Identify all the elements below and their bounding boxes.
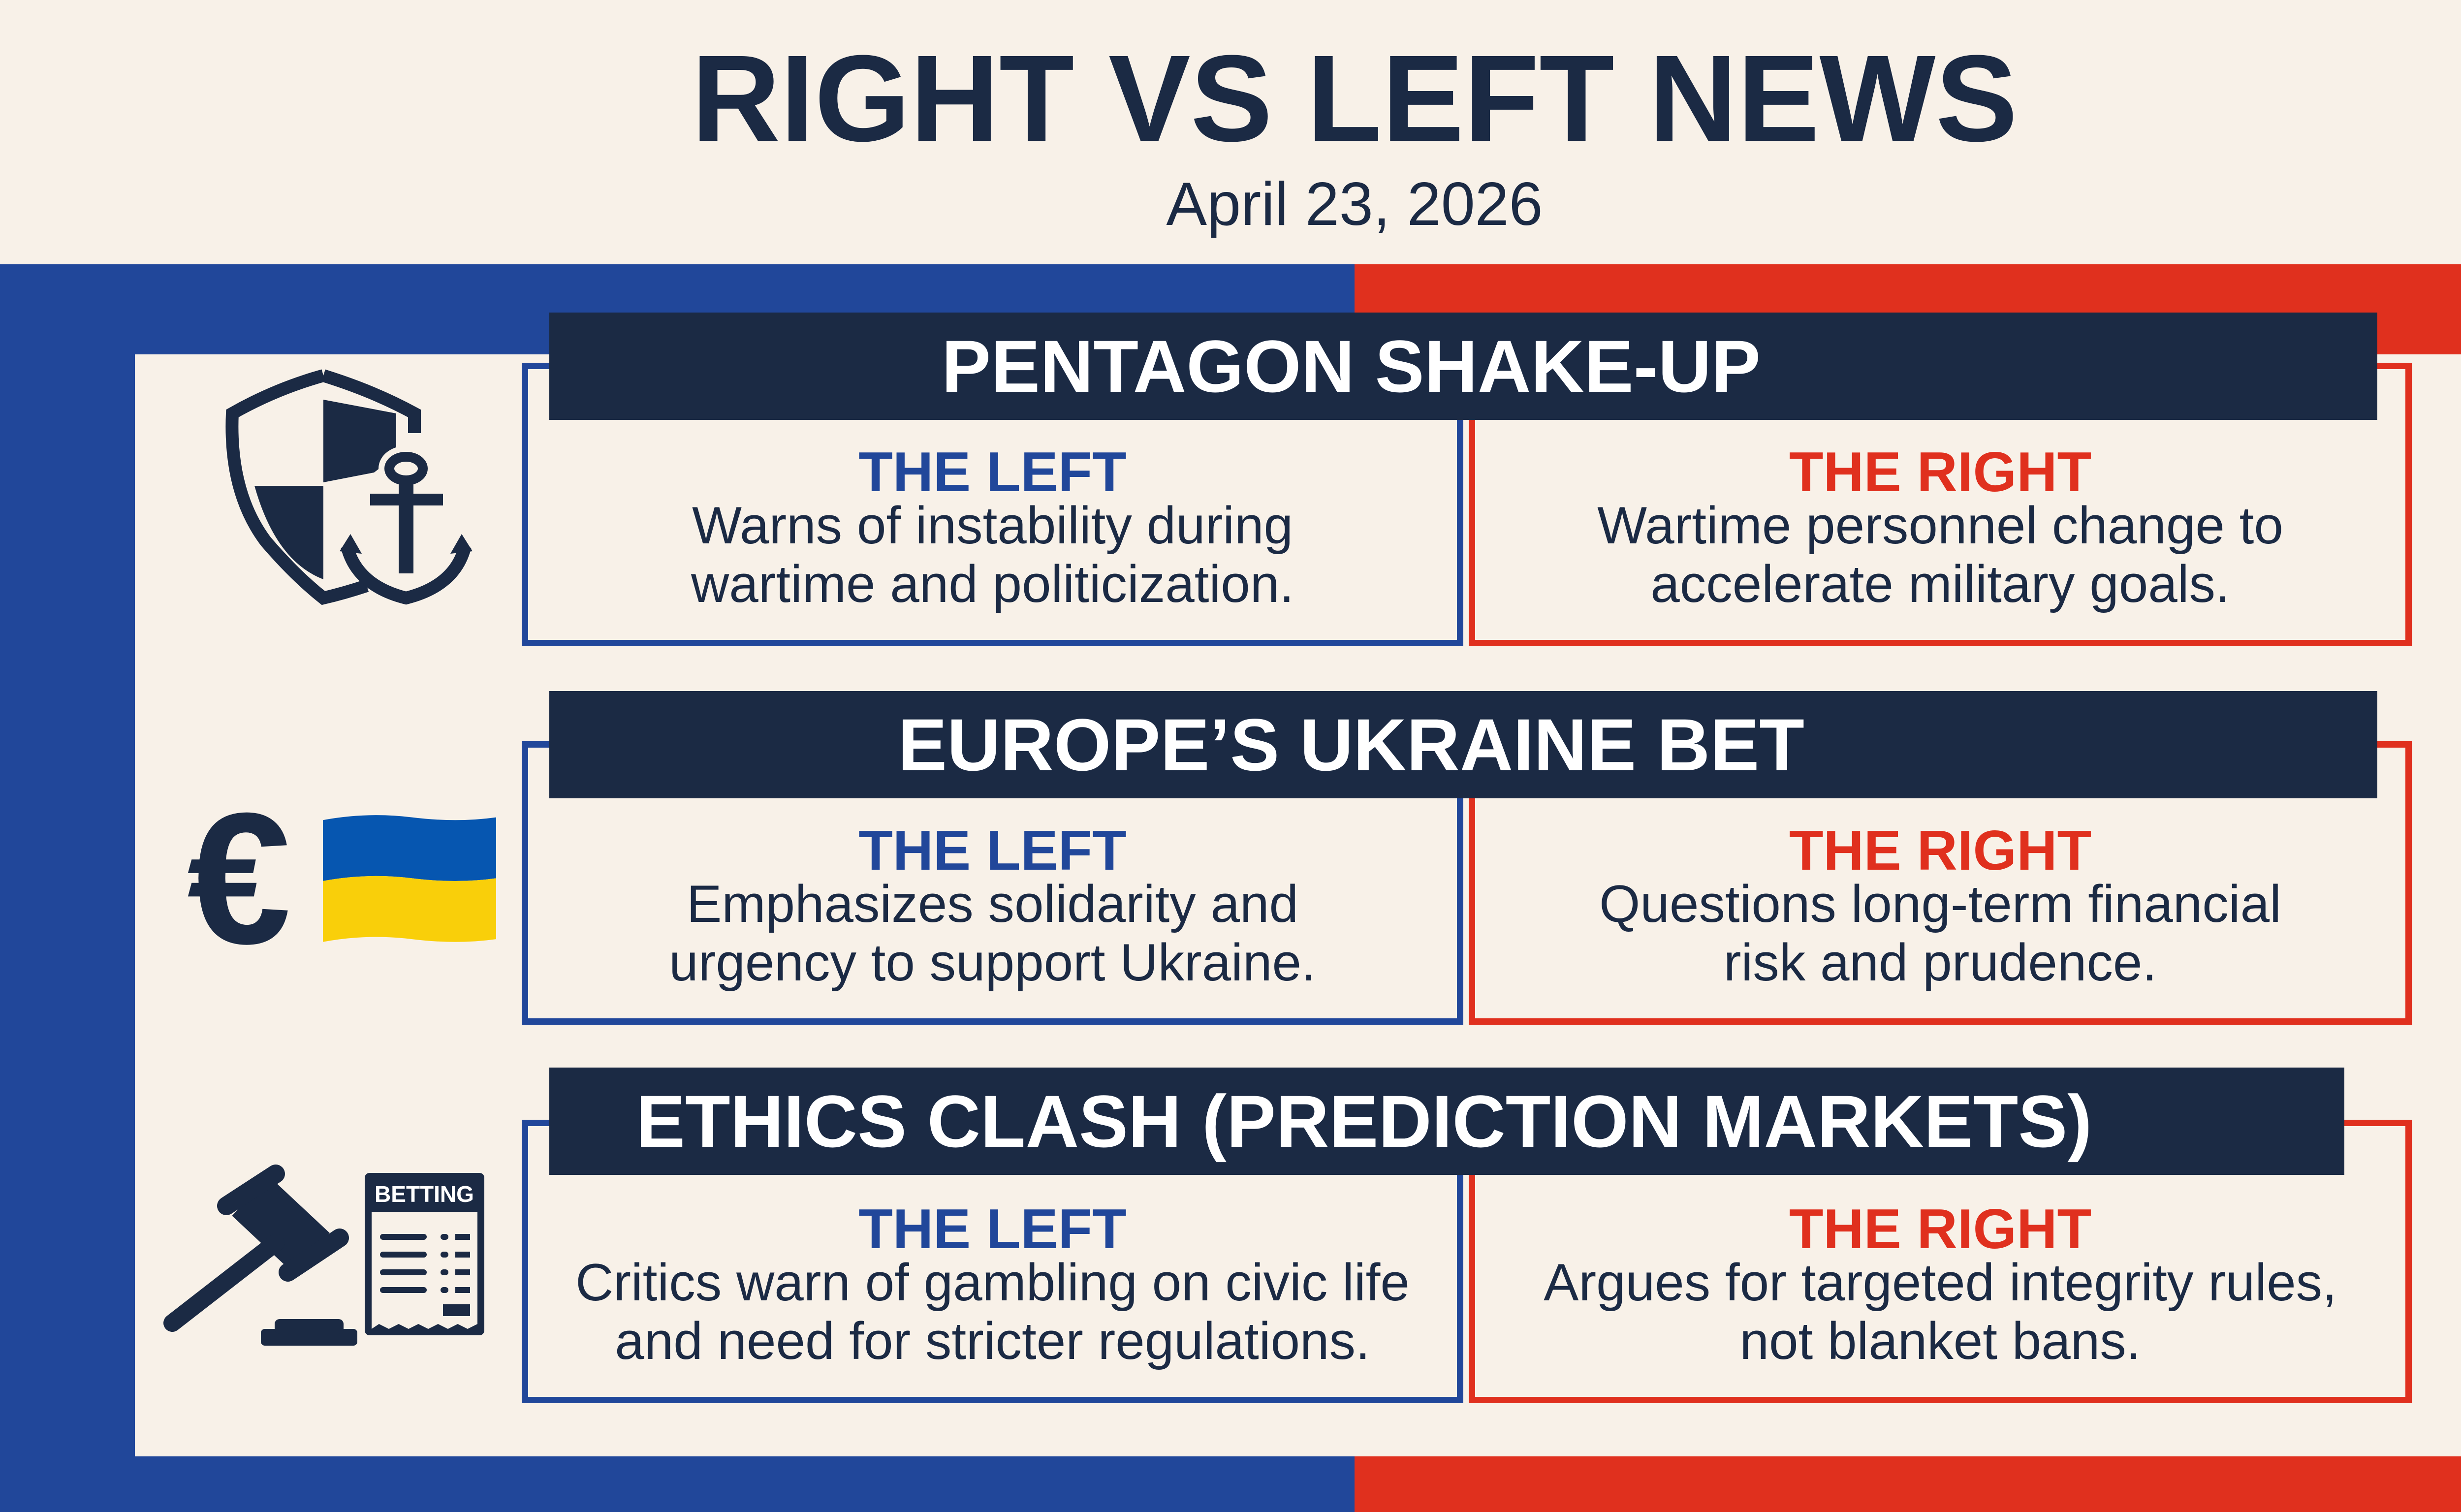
left box: urgency to support Ukraine.: [669, 933, 1316, 992]
left box: THE LEFT: [858, 441, 1127, 504]
right box: [1469, 363, 2412, 646]
left box: wartime and politicization.: [691, 554, 1294, 613]
left box: Emphasizes solidarity and: [687, 874, 1298, 933]
title: RIGHT VS LEFT NEWS: [692, 30, 2018, 167]
right box: Questions long-term financial: [1599, 874, 2281, 933]
icon: shield and anchor: [225, 369, 473, 605]
inner panel: [135, 354, 2461, 1456]
heading: [549, 1068, 2344, 1175]
icon: gavel and betting slip: [163, 1165, 484, 1346]
right box: risk and prudence.: [1724, 933, 2157, 992]
panel: pentagon shake-up: [522, 313, 2412, 646]
blue background half: [0, 264, 1355, 1512]
right box: not blanket bans.: [1739, 1311, 2141, 1370]
left box: THE LEFT: [858, 1198, 1127, 1260]
left box: THE LEFT: [858, 819, 1127, 882]
right box: Argues for targeted integrity rules,: [1544, 1253, 2337, 1312]
heading: ETHICS CLASH (PREDICTION MARKETS): [636, 1080, 2092, 1163]
left box: [522, 1120, 1463, 1403]
panel: ethics clash: [522, 1068, 2412, 1403]
left box: [522, 363, 1463, 646]
icon: euro and ukraine flag: €: [187, 774, 291, 983]
right box: Wartime personnel change to: [1597, 496, 2283, 555]
icon: gavel and betting slip: BETTING: [375, 1181, 474, 1207]
right box: THE RIGHT: [1789, 1198, 2091, 1260]
left box: Critics warn of gambling on civic life: [575, 1253, 1410, 1312]
heading: [549, 691, 2377, 798]
right box: [1469, 741, 2412, 1025]
panel: europe's ukraine bet: [522, 691, 2412, 1025]
right box: [1469, 1120, 2412, 1403]
left box: [522, 741, 1463, 1025]
left box: Warns of instability during: [692, 496, 1293, 555]
left box: and need for stricter regulations.: [615, 1311, 1370, 1370]
heading: EUROPE’S UKRAINE BET: [898, 703, 1804, 786]
heading: [549, 313, 2377, 420]
right box: THE RIGHT: [1789, 819, 2091, 882]
right box: THE RIGHT: [1789, 441, 2091, 504]
right box: accelerate military goals.: [1650, 554, 2230, 613]
date: April 23, 2026: [1166, 170, 1543, 238]
icon: euro and ukraine flag: [187, 774, 496, 983]
red background half: [1355, 264, 2461, 1512]
heading: PENTAGON SHAKE-UP: [942, 325, 1761, 408]
